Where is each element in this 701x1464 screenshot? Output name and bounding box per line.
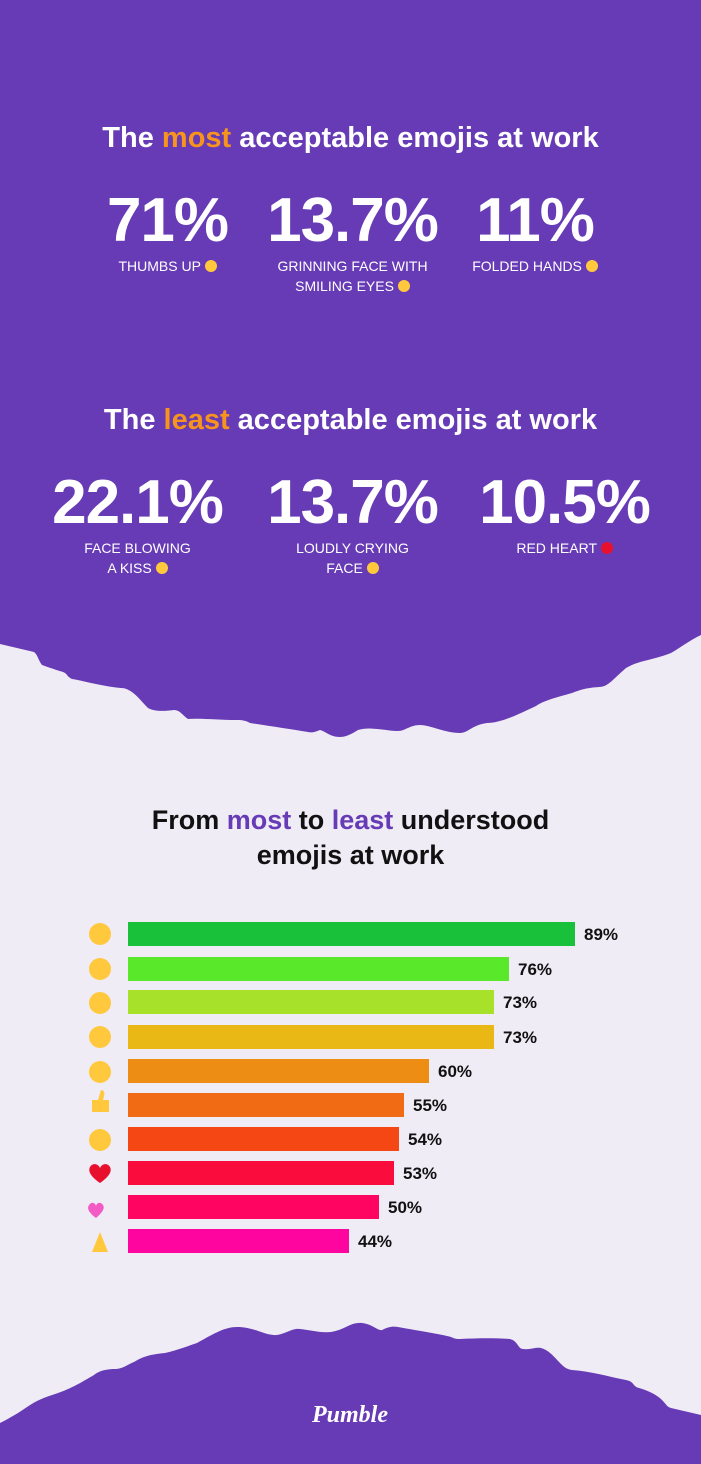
stat: 22.1% face blowing a kiss: FACE BLOWING — [84, 540, 191, 556]
bar chart: 89% — [584, 925, 618, 944]
stat: 13.7% grinning face: GRINNING FACE WITH — [277, 258, 428, 274]
stat: 10.5% red heart: RED HEART — [516, 540, 597, 556]
stat: 13.7% loudly crying face: 13.7% — [267, 468, 438, 537]
stat: 13.7% loudly crying face: FACE — [326, 560, 363, 576]
logo: Pumble: Pumble — [312, 1402, 388, 1428]
chart title — [152, 805, 549, 870]
stat: 13.7% grinning face: 13.7% — [267, 186, 438, 255]
stat: 11% folded hands: FOLDED HANDS — [472, 258, 582, 274]
chart title: emojis at work — [257, 840, 444, 870]
stat: 71% thumbs up: 71% — [107, 186, 228, 255]
bar chart: 55% — [413, 1096, 447, 1115]
bar chart: 54% — [408, 1130, 442, 1149]
bar chart: 60% — [438, 1062, 472, 1081]
stat: 22.1% face blowing a kiss: A KISS — [107, 560, 152, 576]
stat: 13.7% loudly crying face: LOUDLY CRYING — [296, 540, 409, 556]
emoji icons — [88, 923, 111, 1252]
bar chart: 50% — [388, 1198, 422, 1217]
title: most acceptable: The most acceptable emojis at work — [102, 122, 599, 154]
stat: 13.7% grinning face: SMILING EYES — [295, 278, 394, 294]
stat: 13.7% grinning face — [267, 186, 438, 294]
stat: 13.7% loudly crying face — [267, 468, 438, 576]
stat: 11% folded hands: 11% — [476, 186, 594, 255]
bar chart: 76% — [518, 960, 552, 979]
title: least acceptable: The least acceptable emojis at work — [104, 404, 597, 436]
stat: 22.1% face blowing a kiss: 22.1% — [52, 468, 223, 537]
bar chart: 73% — [503, 993, 537, 1012]
stat: 10.5% red heart: 10.5% — [479, 468, 650, 537]
bar chart: 73% — [503, 1028, 537, 1047]
bar chart: 53% — [403, 1164, 437, 1183]
stat: 71% thumbs up: THUMBS UP — [118, 258, 201, 274]
chart title: From most to least understood — [152, 805, 549, 835]
stat: 22.1% face blowing a kiss — [52, 468, 223, 576]
bar chart: 44% — [358, 1232, 392, 1251]
